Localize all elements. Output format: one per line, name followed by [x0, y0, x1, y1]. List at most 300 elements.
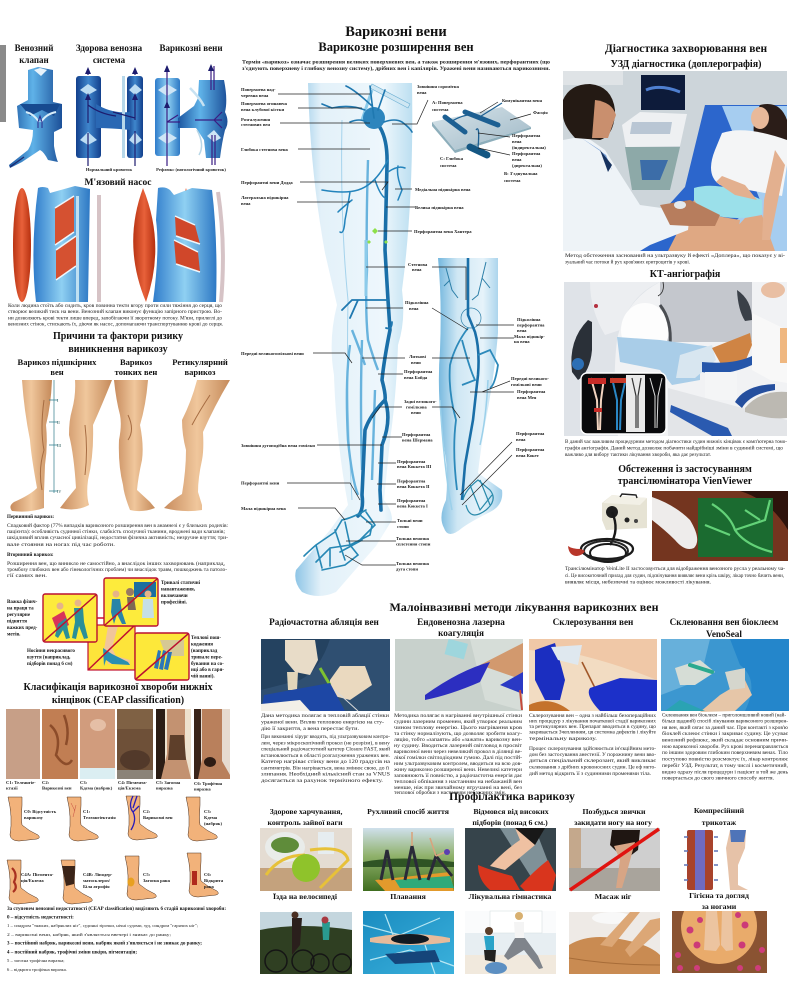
- text: muscle pump description: венозних стінок, стискають їх, діючи як насос, допомагаючи транспортуванню крові до серця.: [8, 322, 223, 328]
- photos: CEAP clinical stages: [6, 709, 230, 779]
- diagram: risk factor pictograms: [43, 578, 189, 680]
- heading: saphenous varicose: вен: [50, 367, 64, 377]
- illustration: leg stage C2: [126, 796, 157, 840]
- text: CEAP stages list: 1 – синдром "тяжких, набряклих ніг", судинні зірочки, нічні судоми, зуд, синдром "гарячих ніг";: [7, 923, 198, 929]
- panel: prevention: [260, 791, 767, 974]
- text: radiofrequency ablation: досягається за рахунок термічного ефекту.: [261, 779, 383, 784]
- captions: leg stages: C6:: [204, 872, 212, 877]
- labels: left leg labels: Мала підшкірна вена: [241, 506, 287, 511]
- text: endovenous laser: ним ультразвуковим контролем, вводиться на всю дов-: [394, 762, 523, 767]
- text: endovenous laser: теплової обпікання з настанням на небажаній вен: [394, 780, 523, 785]
- captions: CEAP photo stages: C5: Загоєна: [156, 780, 181, 785]
- labels: left leg labels: Поверхнева над-: [241, 87, 276, 92]
- heading: transilluminator exam: трансілюмінатора VienViewer: [618, 476, 753, 487]
- labels: prevention row one: Здорове харчування,: [270, 807, 342, 816]
- text: endovenous laser: чином теплову енергію. Цього нагрівання кров: [394, 726, 523, 731]
- callout: heavy physical labour: Важка фізич-: [7, 600, 38, 605]
- caption: ultrasound: зуальний час потоки й рух кров'яних еритроцитів у крові.: [565, 260, 690, 266]
- heading: healthy venous system: Здорова венозна: [76, 43, 143, 53]
- illustration: leg stage C0: [8, 797, 39, 841]
- text: CEAP stages list: [7, 907, 226, 972]
- labels: prevention row one: Позбудься звички: [582, 807, 646, 816]
- caption: reflux: Рефлюкс (патологічний кровоток): [156, 167, 226, 172]
- captions: leg stages: ція/Екзема: [21, 878, 44, 883]
- captions: leg stages: C3:: [204, 809, 212, 814]
- labels: centre labels: Перфорантна: [397, 478, 426, 484]
- illustration: leg stage C4A: [7, 860, 38, 904]
- text: primary varicose body: пацієнта): особливість судинної стінки, слабкість сполучної тканини, вроджені вади клапанів;: [7, 530, 225, 535]
- labels: left leg labels: Латеральна підшкірна: [241, 195, 289, 200]
- heading: ultrasound: УЗД діагностика (доплерографія): [611, 59, 761, 70]
- captions: CEAP photo stages: C2:: [42, 780, 50, 785]
- text: sclerotherapy: них процедур з лікування початкової стадії варикозних: [529, 720, 657, 724]
- text: secondary varicose body: Розширення вен, що виникло не самостійно, а внаслідок інших захворювань (наприклад,: [7, 562, 225, 567]
- heading: saphenous varicose: Варикоз підшкірних: [18, 357, 97, 367]
- text: primary varicose: Первинний варикоз:: [7, 515, 54, 520]
- heading: causes and risk factors: виникнення варикозу: [68, 344, 168, 355]
- captions: leg stages: C4B: Ліподер-: [83, 872, 113, 877]
- deep veins, light: [347, 160, 378, 495]
- pictogram: static loads: [104, 578, 158, 626]
- captions: CEAP photo stages: Кдема (набряк): [80, 786, 113, 790]
- heading: endovenous laser: коагуляція: [438, 628, 484, 638]
- heading: reticular varicose: Ретикулярний: [172, 357, 228, 367]
- panel: diagnostics: [563, 43, 788, 586]
- labels: right leg labels: вена: [516, 437, 526, 442]
- panel: causes and risk factors: [7, 331, 230, 680]
- pictogram: heat exposure: [135, 633, 189, 680]
- labels: centre labels: Стегнова: [408, 262, 428, 267]
- illustration: relaxed muscle pump: [13, 186, 101, 302]
- text: muscle pump description: Коли людина стоїть або сидить, кров повинна текти вгору проти сили тяжіння до серця, що: [8, 304, 223, 309]
- illustration: leg stage C6: [187, 853, 218, 897]
- labels: inset labels: вена: [512, 139, 522, 144]
- illustration: back leg with veins: [438, 258, 502, 534]
- inset: vein systems: [432, 103, 531, 155]
- text: sclerotherapy: термінальну варикозу.: [529, 737, 597, 742]
- heading: varicose veins: Варикозні вени: [159, 43, 223, 53]
- labels: prevention row two: Їзда на велосипеді: [273, 892, 338, 901]
- text: endovenous laser: заповнюють її повністю, а радіочастотна енергія дає: [394, 774, 522, 779]
- heading: varicose vein dilation: Варикозне розширення вен: [318, 40, 474, 54]
- photo: crossed legs with prohibition: [569, 828, 660, 891]
- photo: high heels: [465, 828, 556, 891]
- caption: normal blood flow: Нормальний кровоток: [86, 167, 132, 172]
- text: endovenous laser: теплової обробки з настанням небажаних змін.: [394, 791, 506, 796]
- labels: left leg labels: Розгалуження: [241, 117, 271, 122]
- labels: left leg labels: вена: [241, 201, 251, 206]
- labels: centre labels: вена Шермана: [402, 438, 433, 442]
- text: CEAP stages list: 2 – варикозні вени, набряк, який з'являється ввечері і зникає до ранку;: [7, 932, 171, 938]
- labels: prevention row one: Рухливий спосіб життя: [367, 807, 450, 816]
- callout: heat damage: кодження: [191, 642, 213, 648]
- labels: inset labels: Комунікантна вена: [502, 98, 543, 103]
- heading: reticular varicose: варикоз: [185, 367, 216, 377]
- illustration: front leg with veins: [295, 83, 412, 596]
- labels: right leg labels: Передні великого-: [511, 376, 549, 381]
- text: radiofrequency ablation: дію її закриття, а вена перестає бути.: [261, 727, 359, 732]
- text: primary varicose body: Спадковий фактор (77% випадків варикозного розширення вен в анамнезі є у близьких родичів:: [7, 524, 228, 529]
- labels: centre labels: Велика підшкірна вена: [415, 205, 464, 210]
- text: radiofrequency ablation: При виконанні хірург вводить, під ультразвуковим контро-: [261, 735, 390, 740]
- labels: left leg labels: черевна вена: [241, 93, 269, 98]
- text: endovenous laser: жину варикозно розширеної вени. Невеликі катетери: [393, 768, 523, 773]
- caption: CT angiography: В даний час важливим процедурним методом діагностики судин нижніх кінцівок є комп'ютерна томо-: [565, 440, 787, 445]
- heading: healthy venous system: система: [93, 55, 126, 65]
- illustration: legs with varicose types: IV: [57, 489, 61, 494]
- text: secondary varicose: [7, 553, 228, 579]
- captions: leg stages: Телеангіектазія: [83, 815, 116, 820]
- heading: CT angiography: КТ-ангіографія: [650, 269, 721, 280]
- text: radiofrequency ablation: сантиметрів. Він нагрівається, вена змінює свою, до її: [261, 766, 390, 772]
- heading: small vein varicose: Варикоз: [120, 357, 153, 367]
- illustration: legs with varicose types: I: [57, 398, 59, 403]
- captions: leg stages: варикозу: [24, 815, 44, 820]
- heading: causes and risk factors: Причини та фактори ризику: [53, 331, 183, 342]
- callout: heat damage: бування на со-: [191, 662, 224, 667]
- labels: inset labels: В: З'єднувальна: [504, 171, 538, 176]
- callout: heat damage: нці або в гаря-: [191, 668, 224, 673]
- photo: leg massage: [569, 912, 660, 974]
- captions: leg stages: C4A: Пігмента-: [21, 872, 54, 877]
- callout: heavy physical labour: метів.: [7, 632, 21, 638]
- callout: heavy physical labour: важких пред-: [7, 626, 38, 631]
- labels: prevention row one: контроль зайвої ваги: [267, 818, 343, 827]
- text: CEAP stages list: 4 – постійний набряк, трофічні зміни шкіри, пігментація;: [7, 950, 137, 956]
- panel: CEAP classification: [6, 682, 230, 972]
- captions: leg stages: (набряк): [204, 821, 222, 826]
- text: CEAP stages list: 0 – відсутність недостатності:: [7, 916, 74, 920]
- labels: centre labels: Задні великого-: [404, 399, 437, 404]
- inset: angiography scans: [581, 373, 666, 434]
- heading: VenoSeal: Склеювання вен біоклеєм: [670, 617, 778, 627]
- labels: centre labels: стопи: [397, 524, 409, 529]
- labels: centre labels: сплетення стопи: [396, 542, 431, 546]
- labels: left leg labels: Перфорантні вени: [241, 480, 280, 486]
- text: endovenous laser: судини лазерним променем, який утворює реальним: [394, 720, 522, 725]
- text: VenoSeal: повертається до свого звичного способу життя.: [662, 776, 774, 782]
- caption: transilluminator: Трансілюмінатор VeinLite II застосовується для відображення венозного русла у реальному ча-: [565, 567, 785, 572]
- photo: foot care: [672, 911, 767, 973]
- photo: healthy food: [260, 828, 352, 891]
- text: endovenous laser: та стінку нормалізують, що дозволяє зробити коагу-: [394, 732, 523, 737]
- labels: inset labels: вена: [512, 157, 522, 162]
- labels: centre labels: вена: [417, 90, 427, 95]
- leader lines: [278, 94, 531, 565]
- heading: endovenous laser: Ендовенозна лазерна: [417, 617, 505, 627]
- labels: right leg labels: Мала підшкір-: [514, 334, 545, 339]
- captions: leg stages: Відкрита: [204, 878, 224, 883]
- text: sclerotherapy: склеювання з дрібних кровоносних судин. Це еф мето-: [529, 766, 657, 770]
- labels: inset labels: Перфорантна: [512, 133, 541, 138]
- labels: centre labels: Зовнішня соромітна: [417, 84, 460, 89]
- labels: inset labels: С: Глибока: [440, 156, 464, 161]
- text: intro: з'єднують поверхневу і глибоку венозну систему), дрібних вен і капілярів. Уражені вени називаються варикозними.: [242, 65, 551, 72]
- labels: inset labels: (директальна): [512, 163, 542, 168]
- labels: right leg labels: гомілкові вени: [511, 382, 542, 387]
- heading: transilluminator exam: Обстеження із застосуванням: [618, 464, 752, 475]
- photo: cycling: [260, 912, 352, 974]
- photo: therapeutic exercise: [465, 911, 556, 974]
- labels: inset labels: Перфорантна: [512, 151, 541, 156]
- labels: right leg labels: Перфорантна: [517, 389, 546, 394]
- text: VenoSeal: ною варикозної хвороби. Рух крові перенаправляється: [662, 745, 789, 750]
- captions: leg stages: Біла атрофія: [83, 884, 110, 889]
- callout: uncomfortable shoes: підборів понад 6 см): [27, 662, 73, 667]
- photo: active lifestyle: [363, 828, 454, 891]
- illustration: transilluminator device: [568, 494, 647, 562]
- callout: heavy physical labour: на праця та: [7, 606, 34, 612]
- labels: centre labels: дуга стопи: [396, 566, 418, 572]
- text: sclerotherapy: закривається Зчепленням, ця системна дефектів і лікуйте: [529, 730, 656, 736]
- text: muscle pump description: створює великий тиск на вени. Венозний клапан виконує функцію запірного пристрою. Во-: [8, 310, 222, 315]
- labels: inset labels: система: [504, 178, 521, 183]
- photo: swimming: [363, 911, 454, 974]
- labels: inset labels: (індиректальна): [512, 145, 546, 150]
- callout: heat damage: (наприклад: [191, 649, 218, 654]
- captions: leg stages: рана: [204, 884, 214, 889]
- text: secondary varicose body: гії самих вен.: [7, 574, 47, 579]
- text: VenoSeal: перебіг УЗД. Результат, в тому числі і косметичний,: [662, 764, 788, 769]
- labels: right leg labels: вена Мея: [517, 395, 537, 400]
- labels: prevention row two: Масаж ніг: [595, 892, 632, 901]
- labels: left leg labels: Передні великогомілкові вени: [241, 351, 304, 356]
- text: endovenous laser: менше, ніж при звичайному втручанні на вені, без: [394, 786, 522, 791]
- photo: CT angiography: [564, 282, 787, 436]
- labels: left leg labels: стегнових вен: [241, 122, 270, 127]
- text: primary varicose body: вале стояння на ногах під час роботи.: [7, 543, 115, 548]
- labels: right leg labels: на вена: [514, 339, 530, 344]
- illustration: contracted muscle pump: [133, 187, 223, 302]
- photo: endovenous laser: [395, 639, 523, 711]
- photo: VenoSeal: [661, 639, 789, 712]
- text: CEAP stages list: За ступенем венозної недостатності (CEAP classification) виділяють 6 стадій варикозної хвороби:: [7, 907, 226, 912]
- text: VenoSeal: ня вен, який сягає за даний час. При контакті з кров'ю: [662, 726, 789, 731]
- grey side tab: [0, 45, 6, 122]
- illustration: legs with varicose types: II: [57, 420, 60, 425]
- photo: transilluminated veins: [652, 491, 788, 561]
- labels: right leg labels: вена Кокет: [516, 453, 540, 458]
- labels: inset labels: система: [440, 163, 457, 168]
- heading: small vein varicose: тонких вен: [115, 367, 157, 377]
- heading: VenoSeal: VenoSeal: [706, 629, 742, 639]
- callout: heavy physical labour: підняття: [7, 620, 27, 624]
- text: VenoSeal: по іншим здоровим глибоким поверхневим венах. Тіло: [662, 751, 789, 756]
- captions: leg stages: Варикозні вен: [143, 815, 173, 820]
- great saphenous vein: [358, 122, 390, 516]
- illustration: healthy venous system: [76, 67, 143, 166]
- illustration: legs with varicose types: III: [57, 443, 62, 448]
- illustration: varicose venous system: [155, 64, 228, 166]
- text: primary varicose body: шкідливий вплив сучасної цивілізації, недостатня фізична активність; незручне взуття; три-: [7, 536, 229, 541]
- text: VenoSeal: більш щадний) спосіб лікування варикозного розширен-: [662, 720, 788, 724]
- captions: CEAP photo stages: виразка: [156, 786, 173, 790]
- callout: heat damage: чій ванні).: [191, 674, 215, 680]
- panel: venous valves column: [9, 43, 228, 172]
- labels: centre labels: Перфорантна: [402, 432, 431, 437]
- labels: centre labels: вена Коккета III: [397, 464, 432, 469]
- labels: centre labels: Тильна венозна: [396, 561, 430, 566]
- panel: muscle pump: [8, 177, 223, 328]
- text: CEAP stages list: 5 – загоєна трофічна виразка;: [7, 958, 65, 963]
- text: radiofrequency ablation: злипання. Необхідний кількісний стан за VNUS: [261, 772, 391, 778]
- callout: static loads: включаючи: [161, 594, 188, 599]
- labels: prevention row two: Плавання: [390, 892, 427, 901]
- callout: static loads: професійні.: [161, 600, 188, 606]
- text: VenoSeal: Склеювання вен біоклеєм – приголомшливий новий (най-: [662, 714, 786, 718]
- captions: CEAP photo stages: C3:: [80, 780, 88, 785]
- illustration: leg stage C4B: [61, 860, 92, 904]
- heading: minimally invasive methods: Малоінвазивні методи лікування варикозних вен: [389, 600, 659, 614]
- callout: heat damage: Теплові пош-: [191, 636, 221, 641]
- text: radiofrequency ablation: Дана методика полягає в тепловій абляції стінки: [261, 714, 390, 719]
- callout: uncomfortable shoes: взуття (наприклад,: [27, 656, 71, 660]
- labels: prevention row two: Лікувальна гімнастика: [469, 892, 551, 901]
- caption: transilluminator: виявляє місця, небезпечні та оцінює можливості лікування.: [565, 580, 711, 586]
- labels: right leg labels: Перфорантна: [516, 431, 545, 436]
- labels: right leg labels: перфорантна: [517, 322, 545, 328]
- text: VenoSeal: венозний рефлюкс, який складає основним причи-: [662, 738, 789, 744]
- labels: centre labels: Тильні вени: [397, 518, 423, 523]
- pictogram: heavy lifting: [43, 594, 97, 642]
- text: intro: Термін «варикоз» означає розширення великих поверхневих вен, а також розширення м'язових, перфорантних (що: [242, 58, 550, 66]
- callout: heat damage: тривале пере-: [191, 656, 223, 660]
- text: radiofrequency ablation: лем, через мікроскопічний прокол (не розрізи), в вену: [261, 742, 391, 746]
- text: sclerotherapy: диться спеціальний склерозант, який викликає: [529, 759, 656, 764]
- labels: inset labels: А: Поверхнева: [432, 100, 463, 105]
- labels: centre labels: Литкові: [409, 354, 427, 359]
- captions: leg stages: C2:: [143, 809, 151, 814]
- illustration: leg stage C3: [186, 797, 217, 841]
- labels: prevention row one: закидати ногу на ногу: [574, 818, 652, 827]
- heading: CEAP classification: кінцівок (CEAP classification): [52, 695, 184, 706]
- captions: leg stages: матосклероз/: [83, 878, 111, 883]
- labels: prevention row one: підборів (понад 6 см.): [472, 818, 548, 827]
- photo: radiofrequency ablation: [261, 639, 390, 711]
- panel: minimally invasive treatment: [261, 600, 789, 796]
- heading: radiofrequency ablation: Радіочастотна абляція вен: [269, 617, 380, 627]
- heading: CEAP classification: Класифікація варикозної хвороби нижніх: [24, 682, 212, 693]
- illustration: leg stage C5: [125, 856, 156, 900]
- text: sclerotherapy: Склерозування вен – одна з найбільш безопераційних: [529, 714, 657, 719]
- heading: diagnostics: Діагностика захворювання вен: [605, 43, 768, 55]
- captions: CEAP photo stages: ктазії: [6, 786, 18, 790]
- captions: CEAP photo stages: ція/Екзема: [118, 786, 141, 790]
- labels: centre labels: Перфорантна: [397, 459, 426, 464]
- illustration: venous valve: [9, 67, 62, 168]
- labels: centre labels: вена Бойда: [404, 375, 428, 380]
- photo: sclerotherapy: [529, 639, 657, 711]
- labels: centre labels: Медіальна підшкірна вена: [415, 187, 471, 192]
- caption: CT angiography: важливо для вибору тактики лікування хвороби, яка дає результат.: [565, 453, 711, 458]
- labels: prevention row one: трикотаж: [702, 818, 737, 827]
- labels: centre labels: вени: [411, 360, 421, 365]
- labels: centre labels: гомілкова: [406, 404, 427, 410]
- text: radiofrequency ablation: Катетер нагріває стінку вени до 120 градусів на: [261, 760, 391, 765]
- captions: CEAP photo stages: C4: Пігмента-: [118, 780, 148, 785]
- captions: CEAP photo stages: C1: Телеангіе-: [6, 780, 36, 785]
- text: sclerotherapy: дом без застосування анестезії. У порожнину вени вво-: [529, 753, 656, 758]
- illustration: leg stage C1: [67, 797, 98, 841]
- text: endovenous laser: ляцію, тобто «запаяти» або «зажати» варикозну вен-: [394, 738, 523, 743]
- text: sclerotherapy: Процес склерозування здійснюється ін'єкційним мето-: [529, 747, 656, 752]
- labels: prevention row one: Відмовся від високих: [473, 807, 549, 816]
- captions: leg stages: C0: Відсутність: [24, 809, 57, 814]
- text: secondary varicose body: тромбозу глибоких вен або гінекологічних проблем) чи внаслідок травм, пошкоджень та патоло-: [7, 568, 227, 573]
- labels: centre labels: вена: [412, 267, 422, 272]
- text: endovenous laser: Методика полягає в нагріванні внутрішньої стінки: [394, 714, 523, 719]
- labels: left leg labels: Перфорантні вени Додда: [241, 180, 293, 185]
- text: sclerotherapy: дий метод відкрить її з судинними променями тіла.: [529, 772, 651, 777]
- labels: centre labels: Перфорантна: [404, 369, 433, 374]
- labels: inset labels: Фасція: [533, 110, 548, 115]
- illustration: compression hosiery: [678, 830, 758, 891]
- heading: sclerotherapy: Склерозування вен: [553, 617, 634, 627]
- text: CEAP stages list: 3 – постійний набряк, варикозні вени, набряк який з'являється і не зникає до ранку;: [7, 942, 202, 946]
- labels: centre labels: вена: [409, 306, 419, 311]
- caption: CT angiography: графія ангіографія. Даний метод дозволяє побачити найдрібніші зміни в судинній системі, що: [565, 446, 784, 452]
- text: sclerotherapy: та ретикулярних вен. Препарат вводиться в судину, що: [529, 725, 657, 730]
- title: Варикозні вени: [345, 24, 447, 40]
- text: endovenous laser: лікої гомілки світлодіодним гумою. Далі під постій-: [394, 756, 523, 761]
- captions: CEAP photo stages: виразка: [194, 786, 211, 792]
- text: radiofrequency ablation: встановлюється в області розгалуження уражених вен.: [261, 754, 390, 759]
- callout: static loads: Тривалі статичні: [161, 581, 201, 586]
- labels: centre labels: Тильна венозна: [396, 536, 430, 541]
- labels: centre labels: вена Коккета I: [397, 504, 428, 508]
- callout: static loads: навантаження,: [161, 588, 196, 592]
- caption: ultrasound: Метод обстеження заснований на ультразвуку й ефекті «Доплера», що показує у ві-: [565, 254, 786, 259]
- illustration: legs with varicose types: [10, 380, 230, 512]
- labels: right leg labels: вена: [517, 328, 527, 333]
- labels: centre labels: Перфорантна: [397, 498, 426, 503]
- labels: centre labels: Підколінна: [405, 300, 429, 305]
- labels: prevention row two: за ногами: [702, 902, 737, 911]
- captions: CEAP photo stages: C6: Трофічна: [194, 781, 223, 786]
- labels: right leg labels: Перфорантна: [516, 447, 545, 452]
- labels: left leg labels: Поверхнева огинаюча: [241, 101, 288, 106]
- text: primary varicose: [7, 515, 229, 548]
- text: VenoSeal: поступово повністю розсмоктує їх, лікар контролює: [662, 758, 788, 762]
- green perforator markers: [367, 228, 388, 244]
- panel: varicose vein anatomy: [241, 40, 551, 596]
- text: endovenous laser: ну судину. Вводиться лазерний світловод в просвіт: [394, 744, 522, 749]
- labels: centre labels: вена Коккета II: [397, 484, 430, 489]
- labels: inset labels: система: [432, 107, 449, 112]
- captions: leg stages: C1:: [83, 809, 91, 814]
- text: VenoSeal: видно одразу після процедури і пацієнт в той же день: [662, 770, 788, 776]
- labels: left leg labels: Зовнішня дугоподібна вена гомілки: [241, 443, 315, 448]
- labels: right leg labels: Підколінна: [517, 317, 541, 322]
- labels: prevention row two: Гігієна та догляд: [689, 891, 749, 900]
- labels: centre labels: Перфорантна вена Хантера: [414, 229, 472, 234]
- text: muscle pump description: ни дозволяють крові текти лише вперед, запобігаючи її зворотному потоку. М'язи, прилеглі до: [8, 316, 223, 322]
- text: radiofrequency ablation: ураженої вени. Вплив тепловою енергією на сту-: [261, 720, 385, 726]
- text: VenoSeal: біоклей склеює стінки і закриває судину. Це усуває: [662, 732, 788, 737]
- labels: left leg labels: Глибока стегнова вена: [241, 147, 289, 152]
- captions: leg stages: Загоєна рана: [143, 878, 171, 883]
- text: radiofrequency ablation: спеціальний радіочастотний катетер Closure FAST, який: [261, 748, 391, 752]
- text: endovenous laser: варикозної вени через невеликий прокол в ділянці ве-: [394, 750, 523, 755]
- photo: doppler ultrasound: [563, 71, 787, 251]
- foot network: [304, 510, 375, 570]
- labels: centre labels: вени: [411, 410, 421, 415]
- captions: CEAP photo stages: Варикозні вен: [42, 786, 72, 790]
- heading: venous valve: Венозний: [15, 43, 53, 53]
- heading: venous valve: клапан: [19, 55, 49, 65]
- captions: leg stages: Кдема: [204, 815, 218, 820]
- caption: transilluminator: сі. Це високоточний прилад для судин, підсвічування виявляє вени крізь шкіру, лікар точно бачить вени,: [565, 574, 784, 579]
